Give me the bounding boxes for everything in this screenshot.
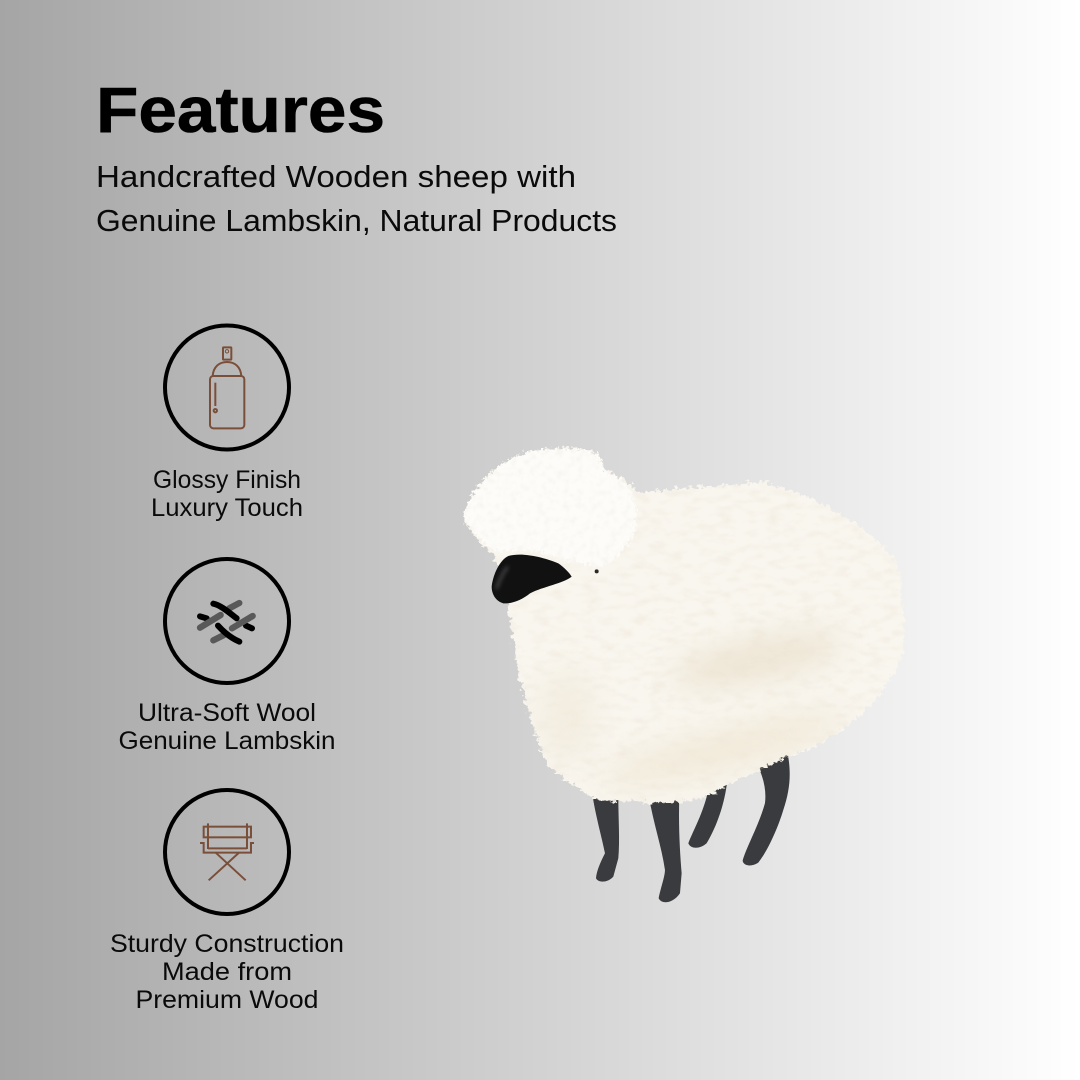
subtitle: Handcrafted Wooden sheep with xyxy=(96,159,576,194)
sheep eye xyxy=(595,569,599,573)
label: sturdy construction: Sturdy Construction xyxy=(110,930,344,958)
label: sturdy construction: Made from xyxy=(162,958,292,986)
sheep face highlight xyxy=(497,567,507,588)
label: glossy finish: Glossy Finish xyxy=(153,466,301,494)
title: Features xyxy=(96,74,385,146)
label: sturdy construction xyxy=(110,930,344,1014)
feature: glossy finish xyxy=(151,326,303,522)
label: glossy finish xyxy=(151,466,303,522)
sheep face xyxy=(492,555,572,603)
sheep body fleece xyxy=(463,449,905,803)
feature: ultra-soft wool xyxy=(118,559,336,755)
sheep legs xyxy=(593,752,790,902)
feature: sturdy construction xyxy=(110,790,344,1014)
sheep product figure xyxy=(463,449,905,902)
sheep head fleece xyxy=(463,449,637,567)
label: ultra-soft wool: Genuine Lambskin xyxy=(118,727,336,755)
subtitle xyxy=(96,159,617,238)
label: sturdy construction: Premium Wood xyxy=(136,986,318,1014)
subtitle: Genuine Lambskin, Natural Products xyxy=(96,203,617,238)
icon: spray bottle xyxy=(165,326,289,450)
label: glossy finish: Luxury Touch xyxy=(151,494,303,522)
label: ultra-soft wool xyxy=(118,699,336,755)
icon: woven strands xyxy=(165,559,289,683)
sheep fleece shading xyxy=(540,622,851,800)
label: ultra-soft wool: Ultra-Soft Wool xyxy=(138,699,316,727)
icon: director chair xyxy=(165,790,289,914)
